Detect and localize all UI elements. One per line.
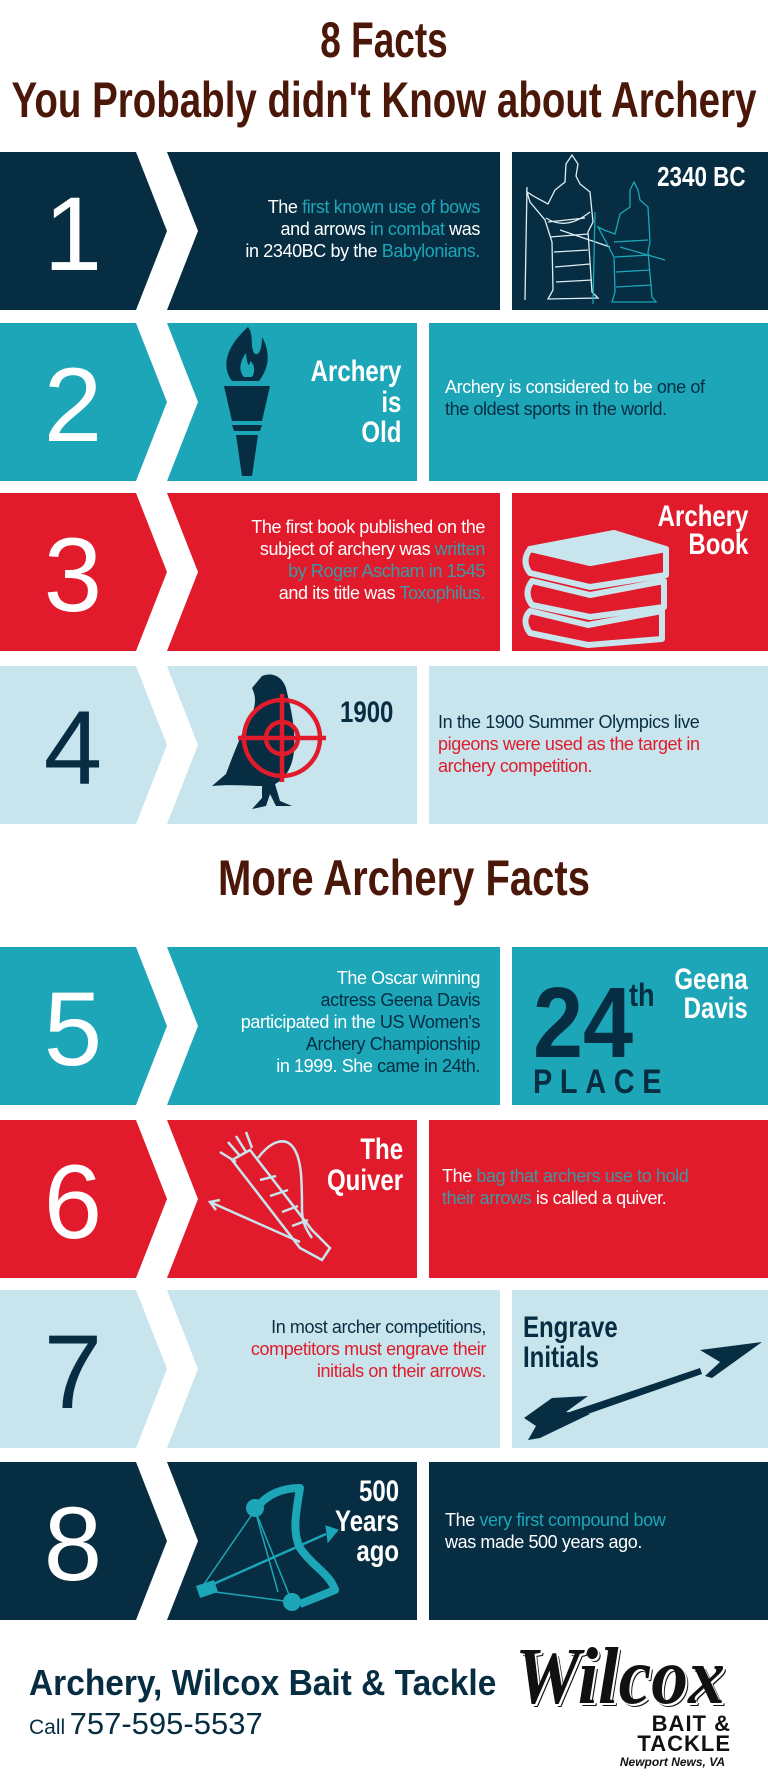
- fact 4 text: In the 1900 Summer Olympics live: [438, 712, 699, 732]
- label: Geena Davis: [675, 963, 748, 1025]
- fact 7 text: [251, 1317, 486, 1381]
- logo: Wilcox Bait & Tackle: BAIT &: [652, 1711, 731, 1736]
- footer: phone: Call 757-595-5537: [29, 1706, 263, 1741]
- label: Engrave Initials: Engrave: [523, 1311, 618, 1344]
- title: 8 Facts: [320, 12, 448, 68]
- number 7: 7: [44, 1314, 102, 1431]
- graphic: 24th place: 24: [533, 967, 633, 1079]
- fact 5 text: [241, 968, 480, 1076]
- title: [12, 12, 756, 128]
- icon: books: [526, 533, 666, 645]
- label: 500 Years ago: 500: [359, 1475, 399, 1508]
- icon: engraved arrow: [524, 1342, 762, 1440]
- fact 5 text: in 1999. She came in 24th.: [276, 1056, 480, 1076]
- fact 4 text: archery competition.: [438, 756, 592, 776]
- icon: pigeon with target: [212, 674, 326, 809]
- fact 2 text: the oldest sports in the world.: [445, 399, 667, 419]
- fact 5 text: actress Geena Davis: [321, 990, 480, 1010]
- icon: torch: [224, 327, 270, 476]
- label: 500 Years ago: [335, 1475, 399, 1568]
- fact 8 text: [445, 1510, 666, 1552]
- fact 2 row: [0, 323, 768, 481]
- graphic: 24th place: [533, 967, 669, 1101]
- fact 1 row: [0, 152, 768, 310]
- fact 6 text: [442, 1166, 688, 1208]
- fact 8 text: The very first compound bow: [445, 1510, 665, 1530]
- fact 2 text: [445, 377, 706, 419]
- logo: Wilcox Bait & Tackle: Wilcox: [515, 1633, 725, 1721]
- fact 1 text: and arrows in combat was: [280, 219, 480, 239]
- logo: Wilcox Bait & Tackle: TACKLE: [637, 1731, 731, 1756]
- fact 7 text: initials on their arrows.: [317, 1361, 486, 1381]
- number 6: 6: [44, 1144, 102, 1261]
- fact 1 text: in 2340BC by the Babylonians.: [245, 241, 480, 261]
- label: Archery is Old: Old: [361, 416, 401, 449]
- label: 1900: 1900: [340, 696, 393, 729]
- icon: engraved arrow: C.B.C: [610, 1382, 633, 1398]
- fact 4 row: [0, 666, 768, 824]
- fact 6 text: their arrows is called a quiver.: [442, 1188, 666, 1208]
- label: Geena Davis: Davis: [684, 992, 748, 1025]
- fact 5 row: [0, 947, 768, 1105]
- icon: quiver: [210, 1132, 330, 1260]
- fact 7 text: In most archer competitions,: [271, 1317, 486, 1337]
- fact 3 text: subject of archery was written: [260, 539, 485, 559]
- label: Archery is Old: is: [381, 386, 401, 418]
- title: You Probably didn't Know about Archery: [12, 72, 756, 128]
- label: Engrave Initials: [523, 1311, 618, 1374]
- fact 6 text: The bag that archers use to hold: [442, 1166, 688, 1186]
- fact 4 text: pigeons were used as the target in: [438, 734, 700, 754]
- fact 2 text: Archery is considered to be one of: [445, 377, 705, 397]
- logo: Wilcox Bait & Tackle: [515, 1633, 731, 1769]
- graphic: 24th place: th: [629, 977, 655, 1013]
- fact 1 text: [245, 197, 480, 261]
- label: 500 Years ago: Years: [335, 1505, 399, 1538]
- fact 5 text: participated in the US Women's: [241, 1012, 480, 1032]
- fact 3 text: by Roger Ascham in 1545: [288, 561, 485, 581]
- number 1: 1: [44, 176, 102, 293]
- footer: business name: Archery, Wilcox Bait & Tackle: [29, 1662, 496, 1703]
- number 8: 8: [44, 1486, 102, 1603]
- fact 5 text: Archery Championship: [306, 1034, 480, 1054]
- label: 500 Years ago: ago: [356, 1535, 399, 1568]
- label: The Quiver: [327, 1133, 403, 1197]
- fact 4 text: [438, 712, 700, 776]
- number 4: 4: [44, 690, 102, 807]
- heading: More Archery Facts: More Archery Facts: [218, 850, 590, 906]
- fact 8 text: was made 500 years ago.: [445, 1532, 642, 1552]
- label: Archery Book: [657, 500, 748, 561]
- label: The Quiver: The: [360, 1133, 403, 1166]
- label: Archery Book: Book: [688, 528, 748, 561]
- number 3: 3: [44, 517, 102, 634]
- fact 7 row: [0, 1290, 768, 1448]
- label: Archery is Old: [310, 355, 402, 449]
- icon: compound bow: [196, 1488, 338, 1611]
- graphic: 24th place: PLACE: [533, 1063, 669, 1101]
- fact 1 text: The first known use of bows: [268, 197, 480, 217]
- fact 3 text: and its title was Toxophilus.: [279, 583, 485, 603]
- number 5: 5: [44, 971, 102, 1088]
- label: Engrave Initials: Initials: [523, 1341, 599, 1374]
- logo: Wilcox Bait & Tackle: Newport News, VA: [620, 1755, 725, 1769]
- fact 8 row: [0, 1462, 768, 1620]
- label: Archery is Old: Archery: [310, 355, 401, 388]
- fact 3 row: [0, 493, 768, 651]
- fact 3 text: [251, 517, 485, 603]
- fact 6 row: [0, 1120, 768, 1278]
- fact 7 text: competitors must engrave their: [251, 1339, 486, 1359]
- label: Archery Book: Archery: [657, 500, 748, 533]
- label: The Quiver: Quiver: [327, 1164, 403, 1197]
- icon: babylonian figures: [525, 155, 665, 304]
- fact 3 text: The first book published on the: [251, 517, 485, 537]
- label: 2340 BC: 2340 BC: [658, 161, 746, 192]
- number 2: 2: [44, 347, 102, 464]
- fact 5 text: The Oscar winning: [337, 968, 480, 988]
- label: Geena Davis: Geena: [675, 963, 748, 996]
